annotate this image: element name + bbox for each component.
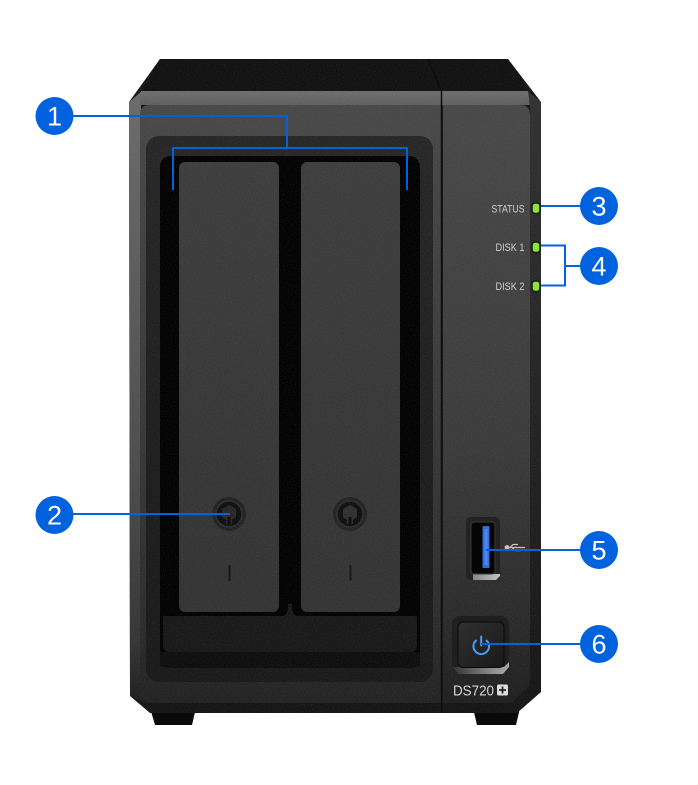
device body xyxy=(129,59,541,713)
callout 3: 3 xyxy=(591,192,607,222)
status labels: DISK 1 xyxy=(496,242,524,254)
callout 1 xyxy=(36,97,74,135)
left edge xyxy=(129,91,148,703)
surface grain xyxy=(129,59,541,713)
tray slit 2 xyxy=(350,565,352,581)
right edge xyxy=(517,91,541,711)
panel seam xyxy=(428,59,442,713)
callout 6: 6 xyxy=(591,630,607,660)
drive bay ramp xyxy=(163,604,417,652)
front face left xyxy=(140,105,441,703)
status labels: STATUS xyxy=(492,204,524,216)
status labels xyxy=(492,204,524,293)
power button xyxy=(452,616,509,674)
USB port xyxy=(466,517,500,580)
callout 4: 4 xyxy=(591,252,607,282)
drive bay floor xyxy=(160,652,420,668)
callout 6 xyxy=(580,625,618,663)
USB symbol xyxy=(505,544,525,550)
status labels: DISK 2 xyxy=(496,281,524,293)
front face right xyxy=(443,105,530,703)
power icon xyxy=(473,636,489,654)
infographic: DS720+ front panel diagram xyxy=(36,58,618,725)
model label: DS720 xyxy=(453,682,494,700)
drive bay opening xyxy=(160,156,420,666)
tray slit 1 xyxy=(228,565,230,581)
callout 2 xyxy=(36,496,74,534)
status LEDs xyxy=(532,203,540,292)
callout lines xyxy=(54,116,599,644)
drive bay recess xyxy=(146,136,433,682)
drive tray 1 xyxy=(179,162,279,612)
callout 4 xyxy=(580,247,618,285)
tray lock 2 xyxy=(333,497,367,531)
light strip xyxy=(140,91,531,105)
top cover xyxy=(142,59,528,91)
tray lock 1 xyxy=(212,497,246,531)
callout 5: 5 xyxy=(591,536,607,566)
callout 5 xyxy=(580,531,618,569)
callout 1: 1 xyxy=(47,102,62,132)
NAS device xyxy=(129,59,541,725)
callout 3 xyxy=(580,187,618,225)
callout 2: 2 xyxy=(47,500,62,530)
feet xyxy=(150,708,520,725)
drive tray 2 xyxy=(301,162,400,612)
bottom lip xyxy=(148,703,517,713)
